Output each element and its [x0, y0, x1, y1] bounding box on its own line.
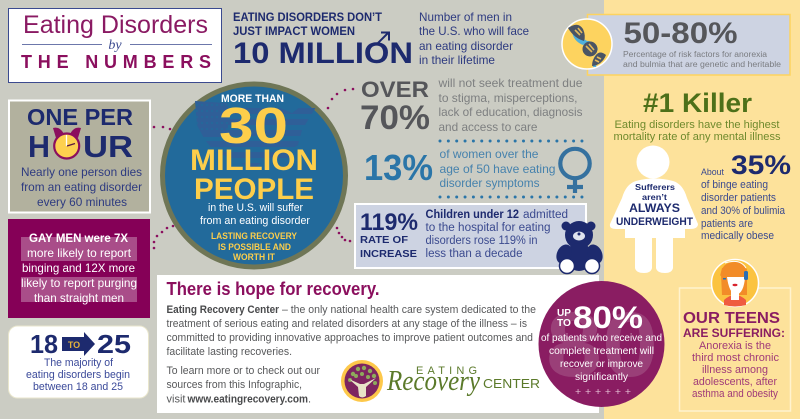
panel: 30 million people circle: WORTH IT: [233, 252, 275, 262]
icon: DNA helix: [562, 19, 612, 69]
callout: gay men statistic: likely to report purging: [21, 276, 137, 290]
panel: 119 percent increase: to the hospital for eating: [426, 222, 550, 234]
panel: 30 million people circle: MORE THAN: [221, 93, 284, 105]
icon: US flag map: [195, 100, 318, 169]
callout: gay men statistic: [8, 219, 150, 318]
panel: hope for recovery: There is hope for recovery.: [166, 279, 380, 299]
title: [8, 8, 222, 82]
panel: teens are suffering: third most chronic: [692, 352, 780, 364]
panel: hope for recovery: [157, 275, 599, 413]
text block: 13 percent of women: age of 50 have eating: [440, 162, 556, 176]
panel: 30 million people circle: LASTING RECOVERY: [211, 231, 297, 241]
callout: up to 80 percent circle: complete treatment will: [549, 345, 654, 357]
panel: ages 18 to 25: 25: [97, 329, 131, 359]
text block: 13 percent of women: disorder symptoms: [440, 176, 540, 190]
logo: Eating Recovery Center: EATING: [416, 365, 477, 377]
panel: one per hour: every 60 minutes: [37, 195, 127, 209]
callout: up to 80 percent circle: 80: [546, 294, 658, 396]
panel: hope for recovery: treatment of serious eating and related disorders at any stage of the illness – is: [166, 318, 527, 330]
text block: over 70 percent: 70%: [360, 99, 430, 137]
text block: 13 percent of women: 13%: [364, 147, 433, 188]
text block: over 70 percent: [360, 76, 583, 137]
panel: genetic risk: and bulmia that are genetic and heritable: [623, 60, 782, 69]
icon: person silhouette with caption: [610, 146, 698, 273]
text block: 35 percent obese: About: [701, 167, 724, 178]
logo: Eating Recovery Center: Recovery: [386, 365, 480, 397]
panel: one per hour: Nearly one person dies: [21, 165, 142, 179]
panel: teens are suffering: asthma and obesity: [692, 388, 779, 400]
panel: 119 percent increase: disorders rose 119% in: [426, 235, 538, 247]
icon: person silhouette with caption: ALWAYS: [629, 203, 680, 215]
callout: gay men statistic: binging and 12X more: [22, 261, 135, 275]
title: by: [108, 38, 122, 53]
callout: up to 80 percent circle: TO: [557, 318, 571, 329]
panel: hope for recovery: committed to providing innovative approaches to improve patient outcomes and: [166, 332, 533, 344]
panel: 119 percent increase: Children under 12: [426, 209, 519, 221]
panel: teens are suffering: OUR TEENS: [683, 310, 780, 327]
panel: one per hour: from an eating disorder: [21, 180, 142, 194]
callout: gay men statistic: GAY MEN were 7X: [29, 231, 128, 245]
panel: one per hour: ONE PER: [27, 104, 133, 130]
icon: female symbol: [560, 149, 590, 193]
panel: teens are suffering: adolescents, after: [693, 376, 777, 388]
panel: genetic risk: 50-80%: [624, 17, 738, 50]
text block: men description: Number of men in: [419, 10, 512, 24]
panel: 30 million people circle: [162, 84, 346, 267]
icon: teen with headset: [712, 260, 758, 306]
callout: gay men statistic: than straight men: [34, 291, 124, 305]
panel: 119 percent increase: [355, 204, 586, 268]
text block: 13 percent of women: of women over the: [440, 147, 539, 161]
panel: ages 18 to 25: eating disorders begin: [26, 369, 130, 381]
panel: 30 million people circle: PEOPLE: [194, 173, 314, 206]
panel: ages 18 to 25: TO: [68, 340, 80, 350]
icon: person silhouette with caption: aren’t: [642, 192, 667, 202]
panel: hope for recovery: – the only national health care system dedicated to the: [282, 304, 536, 316]
icon: person silhouette with caption: UNDERWEIGHT: [616, 216, 693, 228]
panel: hope for recovery: www.eatingrecovery.com: [187, 394, 308, 406]
callout: up to 80 percent circle: 80%: [573, 299, 643, 335]
text block: over 70 percent: and access to care: [438, 120, 538, 134]
text block: 35 percent obese: of binge eating: [701, 179, 768, 191]
text block: 35 percent obese: and 30% of bulimia: [701, 205, 786, 217]
title: THE NUMBERS: [21, 52, 211, 72]
text block: men description: [419, 10, 529, 67]
text block: 13 percent of women: [364, 147, 556, 190]
callout: up to 80 percent circle: significantly: [575, 371, 629, 383]
panel: teens are suffering: [680, 288, 790, 411]
icon: teddy bear: [553, 221, 606, 274]
panel: hope for recovery: .: [308, 394, 311, 406]
title: Eating Disorders: [23, 11, 208, 39]
panel: hope for recovery: Eating Recovery Center: [166, 304, 280, 316]
heading: men statistic: JUST IMPACT WOMEN: [233, 26, 355, 38]
panel: genetic risk: Percentage of risk factors for anorexia: [623, 50, 768, 59]
panel: teens are suffering: ARE SUFFERING:: [683, 328, 785, 340]
heading: men statistic: [233, 12, 413, 70]
text block: 35 percent obese: patients are: [701, 218, 753, 230]
panel: hope for recovery: To learn more or to check out our: [166, 365, 320, 377]
heading: number one killer: Eating disorders have the highest: [614, 119, 780, 131]
text block: over 70 percent: to stigma, misperceptions,: [438, 91, 578, 105]
panel: 119 percent increase: less than a decade: [426, 248, 522, 260]
panel: ages 18 to 25: 18: [30, 329, 58, 359]
callout: up to 80 percent circle: UP: [557, 308, 571, 319]
panel: one per hour: UR: [83, 129, 133, 164]
panel: 119 percent increase: admitted: [523, 209, 568, 221]
heading: number one killer: [614, 88, 781, 143]
text block: 35 percent obese: medically obese: [701, 230, 774, 242]
callout: up to 80 percent circle: of patients who receive and: [541, 332, 662, 344]
panel: hope for recovery: visit: [166, 394, 186, 406]
icon: person silhouette with caption: Sufferers: [635, 182, 675, 192]
heading: men statistic: 10 MILLION: [233, 37, 413, 70]
panel: teens are suffering: Anorexia is the: [699, 340, 771, 352]
panel: 30 million people circle: 30: [219, 97, 288, 154]
logo: Eating Recovery Center: CENTER: [483, 376, 540, 391]
panel: 119 percent increase: RATE OF: [360, 234, 409, 246]
heading: men statistic: EATING DISORDERS DON’T: [233, 12, 382, 24]
text block: 35 percent obese: [701, 150, 791, 242]
callout: up to 80 percent circle: recover or improve: [560, 358, 643, 370]
panel: ages 18 to 25: The majority of: [44, 357, 114, 369]
text block: 35 percent obese: 35%: [731, 150, 791, 180]
callout: gay men statistic: more likely to report: [27, 246, 132, 260]
panel: 30 million people circle: in the U.S. will suffer: [208, 202, 303, 214]
panel: 30 million people circle: from an eating disorder: [200, 215, 310, 227]
panel: teens are suffering: illness among: [702, 364, 768, 376]
text block: over 70 percent: will not seek treatment due: [437, 76, 583, 90]
panel: genetic risk: [588, 14, 790, 75]
panel: one per hour: [9, 100, 150, 212]
text block: men description: an eating disorder: [419, 39, 513, 53]
panel: 30 million people circle: IS POSSIBLE AND: [218, 242, 291, 252]
panel: hope for recovery: facilitate lasting recoveries.: [166, 346, 292, 358]
panel: 119 percent increase: 119%: [360, 209, 418, 236]
heading: number one killer: #1 Killer: [643, 88, 753, 118]
panel: 119 percent increase: INCREASE: [360, 248, 417, 260]
heading: number one killer: mortality rate of any mental illness: [614, 131, 781, 143]
panel: one per hour: H: [28, 129, 50, 164]
text block: men description: the U.S. who will face: [419, 24, 529, 38]
callout: up to 80 percent circle: [538, 281, 664, 407]
panel: ages 18 to 25: [8, 326, 148, 398]
icon: alarm clock: [53, 128, 81, 158]
panel: ages 18 to 25: between 18 and 25: [33, 381, 123, 393]
text block: men description: in their lifetime: [419, 53, 495, 67]
logo: Eating Recovery Center: [341, 360, 540, 402]
panel: hope for recovery: sources from this Infographic,: [166, 379, 302, 391]
text block: over 70 percent: lack of education, diagnosis: [438, 105, 582, 119]
panel: 30 million people circle: MILLION: [190, 144, 318, 177]
text block: over 70 percent: OVER: [361, 77, 429, 102]
text block: 35 percent obese: disorder patients: [701, 192, 776, 204]
callout: up to 80 percent circle: ++++++: [575, 386, 631, 398]
